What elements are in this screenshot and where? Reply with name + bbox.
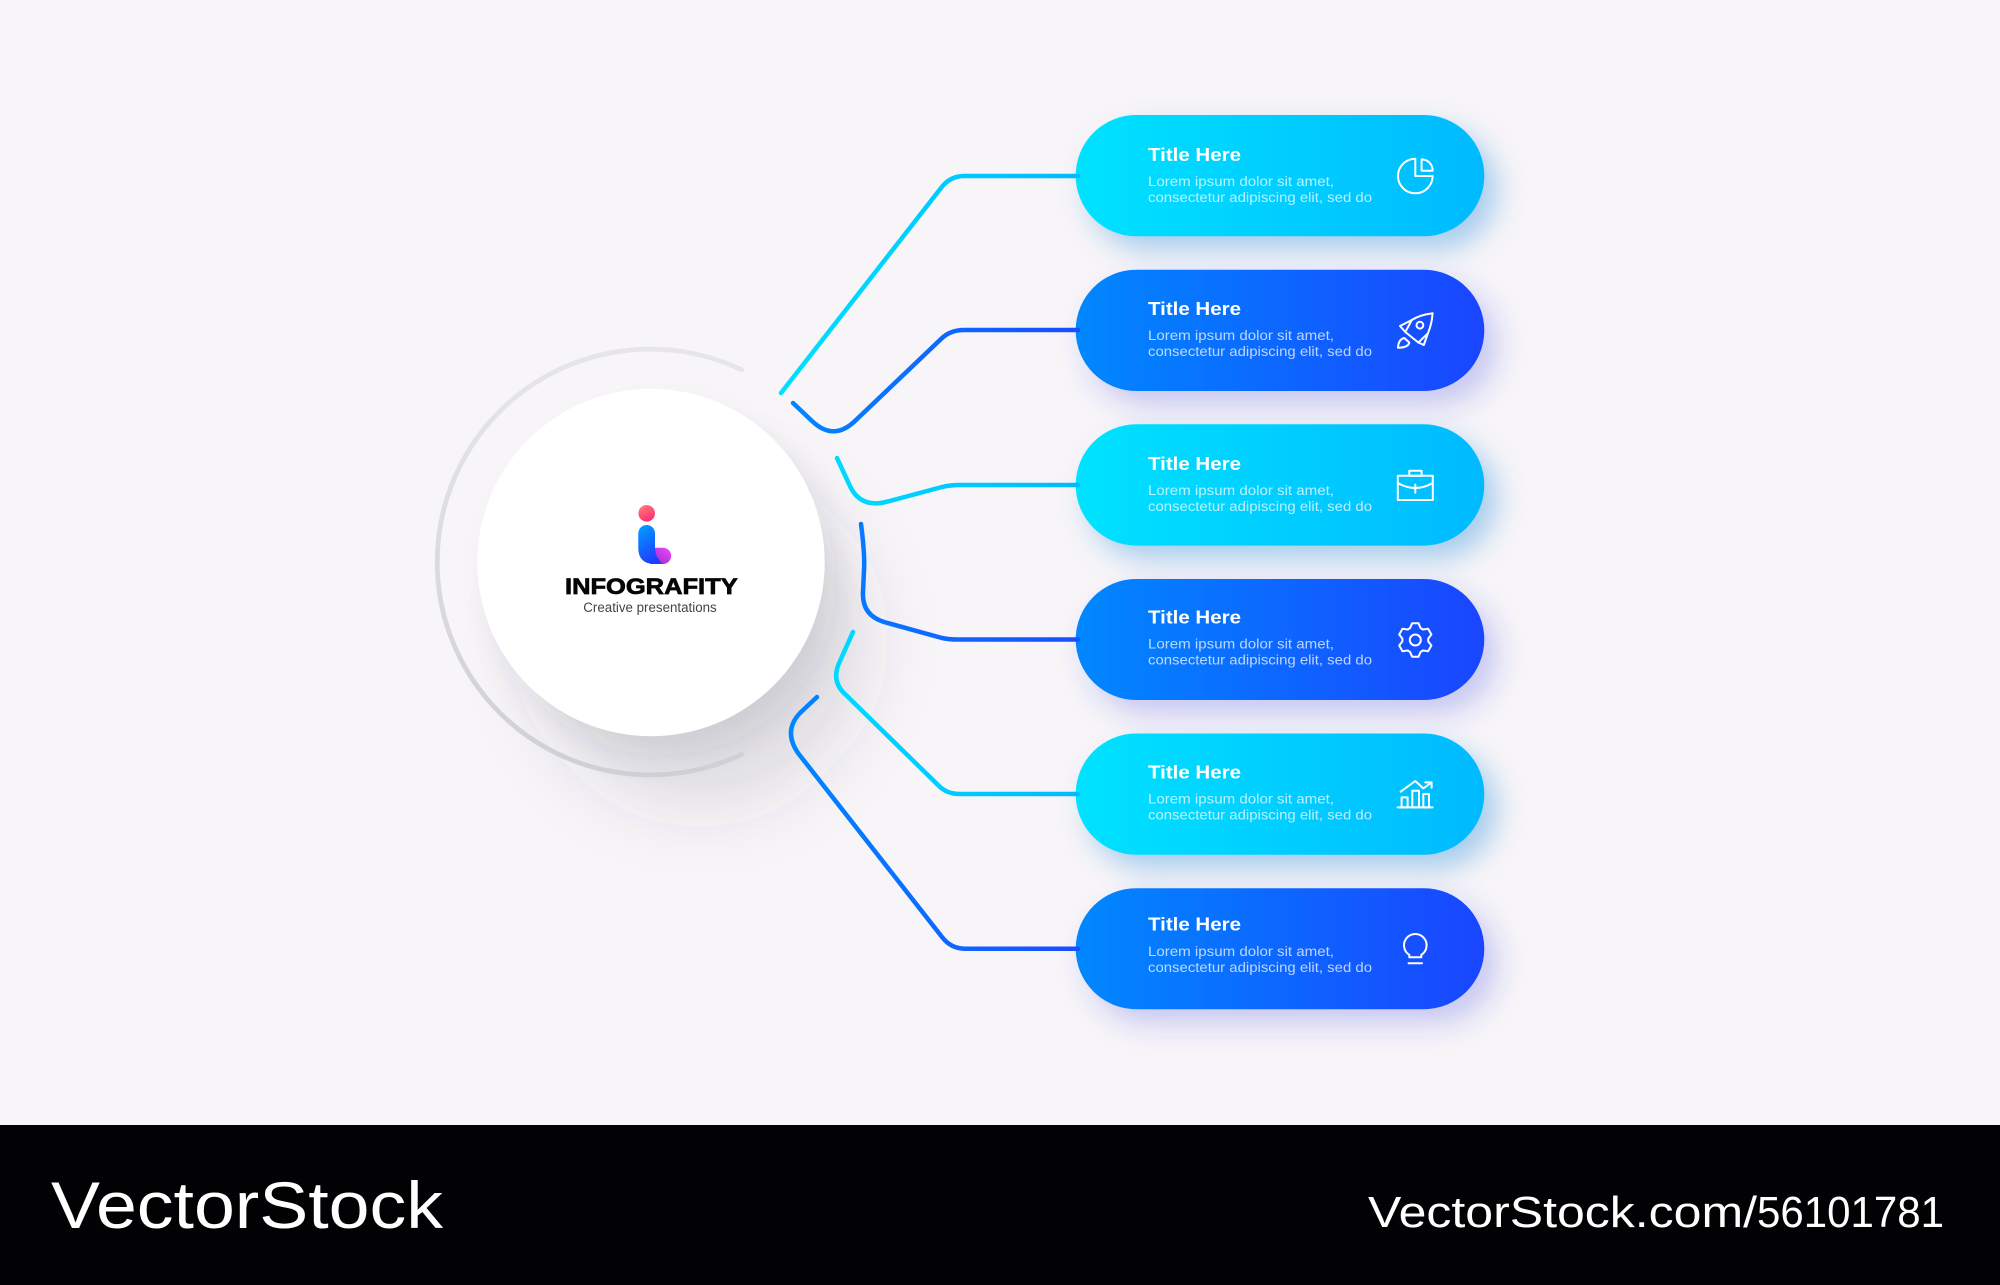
body text: consectetur adipiscing elit, sed do <box>1148 960 1372 975</box>
logo <box>565 505 738 615</box>
connector 1 <box>781 176 1078 393</box>
body text: consectetur adipiscing elit, sed do <box>1148 499 1372 514</box>
body text: Lorem ipsum dolor sit amet, <box>1148 636 1334 651</box>
title: Title Here <box>1148 298 1241 319</box>
footer url: VectorStock.com/ <box>1368 1188 1758 1237</box>
panel: item 1 pill <box>1076 115 1497 250</box>
body text: Lorem ipsum dolor sit amet, <box>1148 328 1334 343</box>
body text: consectetur adipiscing elit, sed do <box>1148 190 1372 205</box>
pill background <box>1076 734 1484 855</box>
connector lines <box>781 176 1078 949</box>
panel: item 6 pill <box>1076 888 1497 1023</box>
body text: consectetur adipiscing elit, sed do <box>1148 344 1372 359</box>
footer url: 56101781 <box>1757 1188 1944 1237</box>
logo tagline: Creative presentations <box>583 600 717 615</box>
panel: item 4 pill <box>1076 579 1497 714</box>
title: Title Here <box>1148 453 1241 474</box>
logo mark: dot <box>638 505 655 522</box>
footer url <box>1368 1188 1944 1237</box>
logo mark: foot <box>650 548 671 564</box>
icon: bar chart with arrow <box>1398 781 1433 807</box>
pill background <box>1076 888 1484 1009</box>
logo mark: stem <box>638 525 663 564</box>
central circle tight shadow <box>491 411 835 755</box>
body text: Lorem ipsum dolor sit amet, <box>1148 791 1334 806</box>
pill background <box>1076 115 1484 236</box>
logo wordmark: INFOGRAFITY <box>565 574 738 599</box>
panel: item 2 pill <box>1076 270 1497 405</box>
body text <box>1148 944 1372 975</box>
central white circle <box>477 389 825 736</box>
body text: consectetur adipiscing elit, sed do <box>1148 807 1372 822</box>
icon: rocket <box>1398 313 1433 348</box>
pill background <box>1076 579 1484 700</box>
title: Title Here <box>1148 761 1241 782</box>
body text: consectetur adipiscing elit, sed do <box>1148 652 1372 667</box>
connector 4 <box>861 524 1078 640</box>
icon: light bulb <box>1404 934 1427 963</box>
icon: gear <box>1399 623 1431 657</box>
panel: item 3 pill <box>1076 424 1497 559</box>
body text <box>1148 328 1372 359</box>
footer bar <box>0 1125 2000 1285</box>
body text: Lorem ipsum dolor sit amet, <box>1148 944 1334 959</box>
connector 6 <box>791 697 1078 949</box>
body text <box>1148 791 1372 822</box>
title: Title Here <box>1148 606 1241 627</box>
body text: Lorem ipsum dolor sit amet, <box>1148 174 1334 189</box>
title: Title Here <box>1148 144 1241 165</box>
icon: pie chart <box>1398 159 1433 193</box>
panel: item 5 pill <box>1076 734 1497 869</box>
body text: Lorem ipsum dolor sit amet, <box>1148 483 1334 498</box>
body text <box>1148 483 1372 514</box>
connector 3 <box>837 458 1078 503</box>
pill background <box>1076 270 1484 391</box>
pill background <box>1076 424 1484 546</box>
outer ring arc <box>437 349 742 775</box>
title: Title Here <box>1148 914 1241 935</box>
body text <box>1148 636 1372 667</box>
footer brand: VectorStock <box>51 1168 444 1242</box>
central circle wide shadow <box>535 475 865 805</box>
connector 5 <box>836 632 1078 794</box>
body text <box>1148 174 1372 205</box>
connector 2 <box>793 330 1078 431</box>
icon: briefcase <box>1398 471 1433 500</box>
